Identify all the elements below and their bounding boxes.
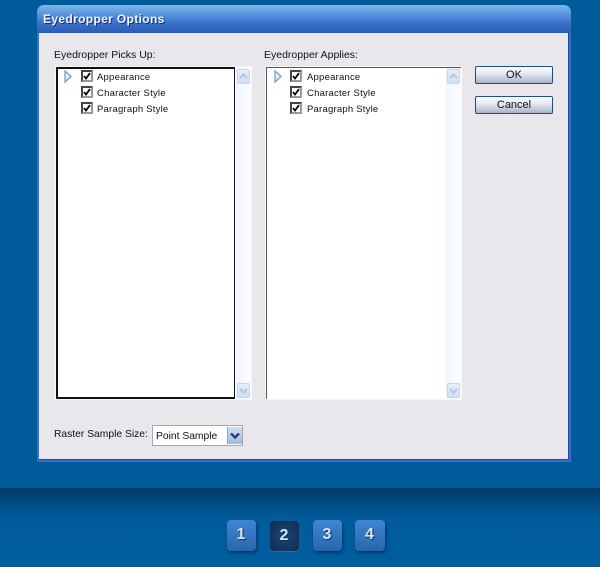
dialog window: [37, 5, 571, 462]
dropdown arrow button: [227, 427, 242, 444]
page button 4: [355, 520, 385, 551]
scroll down button: [237, 383, 250, 398]
button: Cancel: Cancel: [497, 99, 531, 111]
scroll up button: [237, 69, 250, 84]
dropdown: point sample: [152, 425, 243, 446]
checkbox: paragraph style: [290, 102, 302, 114]
list black frame: [56, 67, 235, 399]
item label: character style: Character Style: [97, 88, 166, 99]
page button 3: 3: [323, 526, 331, 543]
scrollbar: [236, 68, 251, 399]
checkbox: character style: [290, 86, 302, 98]
dialog client area: [39, 33, 569, 460]
label: picks up: Eyedropper Picks Up:: [54, 49, 156, 61]
button: OK: OK: [506, 69, 522, 81]
button: Cancel: [475, 96, 553, 114]
panel: applies list: [265, 66, 462, 400]
item label: appearance: Appearance: [307, 72, 360, 83]
checkbox: appearance: [290, 70, 302, 82]
dropdown value: Point Sample: [156, 431, 217, 442]
item label: appearance: Appearance: [97, 72, 150, 83]
title bar: [37, 5, 571, 33]
scroll up button: [447, 69, 460, 84]
icon: expand triangle: [274, 70, 282, 83]
checkbox: character style: [81, 86, 93, 98]
item label: character style: Character Style: [307, 88, 376, 99]
page button 1: [227, 520, 256, 551]
checkbox: paragraph style: [81, 102, 93, 114]
scroll down button: [447, 383, 460, 398]
button: OK: [475, 66, 553, 84]
bottom navigation band: [0, 488, 600, 567]
item label: paragraph style: Paragraph Style: [307, 104, 378, 115]
page button 2 active: [270, 521, 299, 551]
page button 3: [313, 520, 342, 551]
checkbox: appearance: [81, 70, 93, 82]
item label: paragraph style: Paragraph Style: [97, 104, 168, 115]
scrollbar: [446, 68, 461, 399]
page button 1: 1: [237, 526, 245, 543]
label: raster sample size: Raster Sample Size:: [54, 429, 148, 440]
page button 2 active: 2: [280, 527, 288, 544]
page button 4: 4: [365, 526, 374, 543]
list grey frame: [266, 67, 461, 399]
label: applies: Eyedropper Applies:: [264, 49, 358, 61]
icon: expand triangle: [64, 70, 72, 83]
panel: picks up list: [55, 66, 252, 400]
title text: Eyedropper Options: [43, 12, 165, 26]
